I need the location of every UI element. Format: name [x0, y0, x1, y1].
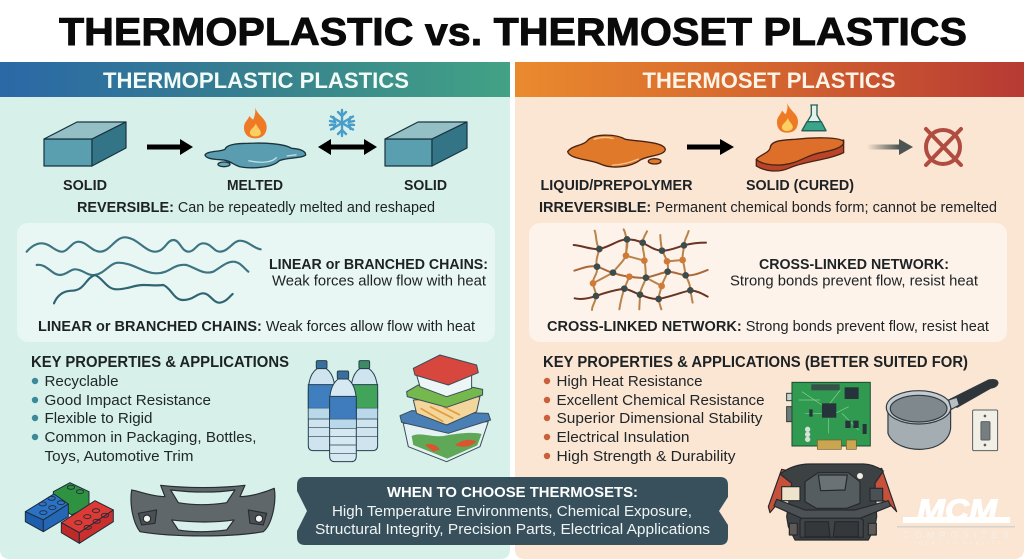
list: thermoplastic properties	[32, 374, 256, 465]
panel: thermoset plastics	[515, 62, 1024, 559]
icon: toy bricks	[25, 483, 113, 543]
icon: plastic bottles	[308, 361, 378, 462]
label: melted: MELTED	[227, 178, 283, 194]
icon: stacked food containers	[400, 355, 491, 462]
list: thermoset properties: Excellent Chemical Resistance	[556, 393, 764, 409]
header: thermoplastic plastics: THERMOPLASTIC PLASTICS	[103, 68, 409, 93]
text: network summary: CROSS-LINKED NETWORK: Strong bonds prevent flow, resist heat	[547, 319, 989, 335]
banner: when to choose thermosets	[297, 477, 728, 545]
list: thermoplastic properties: Flexible to Rigid	[44, 411, 152, 427]
text: chains description: Weak forces allow flow with heat	[272, 274, 486, 290]
label: solid: SOLID	[63, 178, 107, 194]
text: irreversible: IRREVERSIBLE: Permanent chemical bonds form; cannot be remelted	[539, 200, 997, 216]
logo: MCM Composites: IDEAS TO REALITY	[915, 541, 1001, 547]
text: network description	[730, 257, 978, 290]
diagram: polymer chains	[27, 237, 261, 303]
arrow: solid to melted	[147, 139, 193, 155]
arrow: faded	[867, 139, 913, 155]
icon: solid block right	[385, 122, 467, 166]
banner: when to choose thermosets: Structural Integrity, Precision Parts, Electrical Applications	[315, 521, 710, 538]
label: solid: SOLID	[404, 178, 447, 194]
icon: flask	[802, 105, 826, 131]
header: thermoset plastics	[515, 62, 1024, 97]
text: reversible: REVERSIBLE: Can be repeatedly melted and reshaped	[77, 200, 435, 216]
label: solid cured: SOLID (CURED)	[746, 178, 854, 194]
icon: liquid prepolymer puddle	[568, 135, 665, 167]
title: THERMOPLASTIC vs. THERMOSET PLASTICS	[59, 11, 967, 54]
icon: engine bay	[768, 464, 897, 540]
header: thermoset plastics: THERMOSET PLASTICS	[642, 68, 896, 93]
arrow: liquid to solid	[687, 139, 734, 155]
panel: linear or branched chains	[17, 223, 495, 342]
list: thermoplastic properties: Common in Packaging, Bottles,	[44, 430, 256, 446]
list: thermoplastic properties: Good Impact Resistance	[44, 393, 211, 409]
icon: solid block left	[44, 122, 126, 166]
icon: cooking pot	[886, 380, 998, 449]
heading: key properties: KEY PROPERTIES & APPLICATIONS	[31, 354, 289, 371]
icon: cured solid	[756, 138, 844, 171]
icon: flame	[777, 103, 798, 133]
icon: snowflake	[330, 110, 354, 136]
logo: MCM Composites: MCM	[917, 494, 998, 527]
list: thermoset properties: High Strength & Durability	[556, 449, 736, 465]
list: thermoplastic properties: Recyclable	[44, 374, 118, 390]
banner: when to choose thermosets: High Temperature Environments, Chemical Exposure,	[332, 503, 692, 520]
icon: flame	[244, 107, 267, 138]
text: network description: Strong bonds prevent flow, resist heat	[730, 274, 978, 290]
icon: melted puddle	[205, 143, 306, 168]
text: chains description: LINEAR or BRANCHED CHAINS:	[269, 257, 488, 273]
icon: crossed circle	[926, 129, 961, 165]
icon: circuit board	[787, 382, 870, 449]
list: thermoplastic properties: Toys, Automotive Trim	[44, 449, 194, 465]
list: thermoset properties: High Heat Resistance	[556, 374, 702, 390]
logo: MCM Composites: COMPOSITES	[903, 530, 1009, 540]
list: thermoset properties	[544, 374, 764, 465]
logo: MCM Composites	[897, 494, 1015, 547]
panel: cross-linked network	[529, 223, 1007, 342]
icon: car bumper	[131, 485, 275, 536]
text: chains summary: LINEAR or BRANCHED CHAINS: Weak forces allow flow with heat	[38, 319, 475, 335]
header: thermoplastic plastics	[0, 62, 510, 97]
heading: key properties better suited for: KEY PROPERTIES & APPLICATIONS (BETTER SUITED FOR)	[543, 354, 968, 371]
arrow: melted to solid reversible	[318, 139, 377, 155]
text: chains description	[269, 257, 488, 290]
panel: thermoplastic plastics	[0, 62, 510, 559]
diagram: cross-linked network	[574, 229, 708, 310]
list: thermoset properties: Electrical Insulation	[556, 430, 690, 446]
label: liquid prepolymer: LIQUID/PREPOLYMER	[540, 178, 693, 194]
list: thermoset properties: Superior Dimensional Stability	[556, 411, 763, 427]
banner: when to choose thermosets: WHEN TO CHOOSE THERMOSETS:	[387, 484, 638, 501]
icon: wall switch	[973, 410, 998, 451]
text: network description: CROSS-LINKED NETWORK:	[759, 257, 949, 273]
